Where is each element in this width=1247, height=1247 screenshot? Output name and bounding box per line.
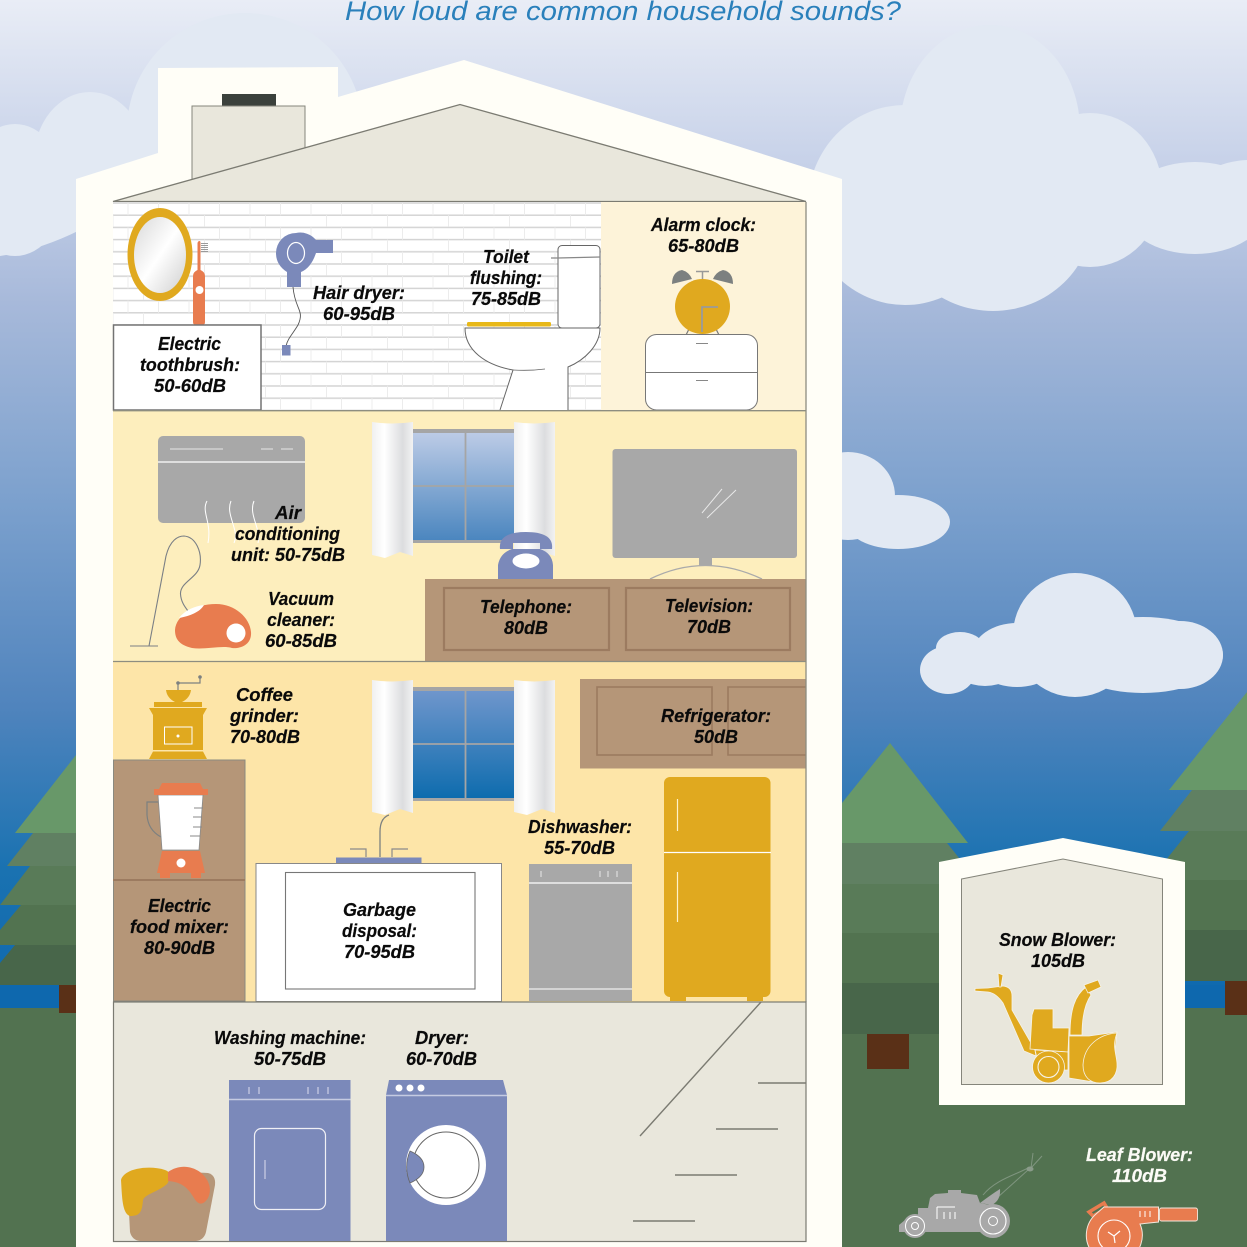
label: electric food mixer: 80-90dB bbox=[144, 938, 215, 958]
label: television: Television: bbox=[665, 596, 753, 616]
label: alarm clock: 65-80dB bbox=[668, 236, 739, 256]
label: leaf blower: Leaf Blower: bbox=[1086, 1145, 1193, 1165]
label box: electric toothbrush: Electric bbox=[158, 334, 221, 354]
label: dishwasher: 55-70dB bbox=[544, 838, 615, 858]
label: leaf blower: 110dB bbox=[1112, 1166, 1167, 1186]
icon: dryer bbox=[386, 1080, 507, 1241]
label: electric food mixer bbox=[130, 896, 229, 958]
label: washing machine: Washing machine: bbox=[214, 1028, 366, 1048]
sink cabinet: 70-95dB bbox=[344, 942, 415, 962]
icon: coffee grinder bbox=[149, 675, 207, 759]
panel: living room bbox=[113, 411, 806, 661]
tan counter: food mixer bbox=[113, 760, 245, 1001]
label: telephone: 80dB bbox=[504, 618, 548, 638]
label: washing machine bbox=[214, 1028, 366, 1069]
label box: electric toothbrush: 50-60dB bbox=[154, 376, 226, 396]
icon: nightstand bbox=[646, 334, 758, 410]
icon: toilet bbox=[465, 246, 600, 410]
icon: refrigerator bbox=[664, 777, 771, 1001]
icon: lawn mower bbox=[899, 1153, 1042, 1238]
icon: alarm clock bbox=[672, 270, 733, 335]
icon: hair dryer bbox=[276, 233, 333, 356]
icon: snow blower bbox=[975, 973, 1117, 1083]
label: alarm clock: Alarm clock: bbox=[650, 215, 756, 235]
label: dryer: 60-70dB bbox=[406, 1049, 477, 1069]
cloud: middle right bbox=[920, 573, 1223, 697]
label: toilet flushing: Toilet bbox=[483, 247, 530, 267]
icon: window bbox=[372, 680, 555, 815]
label: electric food mixer: Electric bbox=[148, 896, 211, 916]
label box: electric toothbrush: toothbrush: bbox=[140, 355, 240, 375]
label: hair dryer bbox=[313, 283, 405, 324]
sink cabinet: Garbage bbox=[343, 900, 416, 920]
label: electric food mixer: food mixer: bbox=[130, 917, 229, 937]
icon: food mixer bbox=[147, 783, 208, 878]
attic roof bbox=[113, 104, 806, 202]
icon: telephone bbox=[498, 532, 553, 579]
label: television bbox=[665, 596, 753, 637]
label: vacuum cleaner: 60-85dB bbox=[265, 631, 337, 651]
icon: electric toothbrush bbox=[193, 241, 208, 325]
panel: kitchen bbox=[113, 662, 806, 1002]
label: air conditioning unit bbox=[231, 503, 345, 565]
label: vacuum cleaner bbox=[265, 589, 337, 651]
panel: bedroom bbox=[601, 202, 806, 410]
label: air conditioning unit: conditioning bbox=[235, 524, 340, 544]
label: snow blower: 105dB bbox=[1031, 951, 1085, 971]
label: dishwasher bbox=[528, 817, 632, 858]
icon: dishwasher bbox=[529, 864, 632, 1001]
icon: leaf blower bbox=[1086, 1203, 1198, 1247]
label: coffee grinder: 70-80dB bbox=[230, 727, 300, 747]
label: dryer: Dryer: bbox=[415, 1028, 469, 1048]
label: toilet flushing: flushing: bbox=[470, 268, 542, 288]
cloud: upper right bbox=[808, 25, 1247, 311]
icon: mirror bbox=[128, 208, 192, 301]
chimney bbox=[192, 94, 305, 180]
label: alarm clock bbox=[650, 215, 756, 256]
icon: air conditioner bbox=[158, 436, 305, 543]
stairs bbox=[633, 1002, 806, 1221]
label: air conditioning unit: Air bbox=[274, 503, 302, 523]
label: telephone bbox=[480, 597, 572, 638]
icon: vacuum cleaner bbox=[130, 536, 251, 648]
label: washing machine: 50-75dB bbox=[254, 1049, 326, 1069]
label: coffee grinder: Coffee bbox=[236, 685, 293, 705]
brick wall bbox=[113, 202, 601, 410]
label: television: 70dB bbox=[687, 617, 731, 637]
label: refrigerator: Refrigerator: bbox=[661, 706, 771, 726]
cloud: middle behind house bbox=[801, 452, 950, 549]
tree: centre bbox=[842, 743, 980, 1069]
tree: right bbox=[1150, 692, 1247, 1015]
panel: bathroom bbox=[113, 202, 601, 410]
label: refrigerator: 50dB bbox=[694, 727, 738, 747]
icon: washing machine bbox=[229, 1080, 350, 1241]
tree: left bbox=[0, 755, 77, 1013]
label: dishwasher: Dishwasher: bbox=[528, 817, 632, 837]
label: toilet flushing bbox=[470, 247, 542, 309]
label: snow blower: Snow Blower: bbox=[999, 930, 1116, 950]
panel: basement bbox=[114, 1002, 806, 1242]
icon: window bbox=[372, 422, 555, 558]
label: hair dryer: 60-95dB bbox=[323, 304, 395, 324]
icon: sink and faucet bbox=[336, 815, 422, 863]
cabinet bbox=[425, 579, 806, 661]
house shell bbox=[76, 60, 842, 1247]
cloud: upper left bbox=[0, 13, 363, 256]
label: snow blower bbox=[999, 930, 1116, 971]
sink cabinet: disposal: bbox=[342, 921, 417, 941]
label: coffee grinder: grinder: bbox=[229, 706, 299, 726]
label: coffee grinder bbox=[229, 685, 300, 747]
label box: electric toothbrush bbox=[114, 325, 261, 410]
label: dryer bbox=[406, 1028, 477, 1069]
label: leaf blower bbox=[1086, 1145, 1193, 1186]
sink cabinet bbox=[256, 864, 502, 1002]
label: telephone: Telephone: bbox=[480, 597, 572, 617]
label: toilet flushing: 75-85dB bbox=[471, 289, 541, 309]
icon: TV bbox=[612, 449, 797, 579]
upper cabinets bbox=[580, 679, 806, 768]
shed bbox=[939, 838, 1185, 1105]
icon: laundry basket bbox=[121, 1167, 215, 1241]
label: hair dryer: Hair dryer: bbox=[313, 283, 405, 303]
lake and ground bbox=[0, 985, 1247, 1247]
label: vacuum cleaner: Vacuum bbox=[268, 589, 334, 609]
label: air conditioning unit: unit: 50-75dB bbox=[231, 545, 345, 565]
label: vacuum cleaner: cleaner: bbox=[267, 610, 335, 630]
label: refrigerator bbox=[661, 706, 771, 747]
